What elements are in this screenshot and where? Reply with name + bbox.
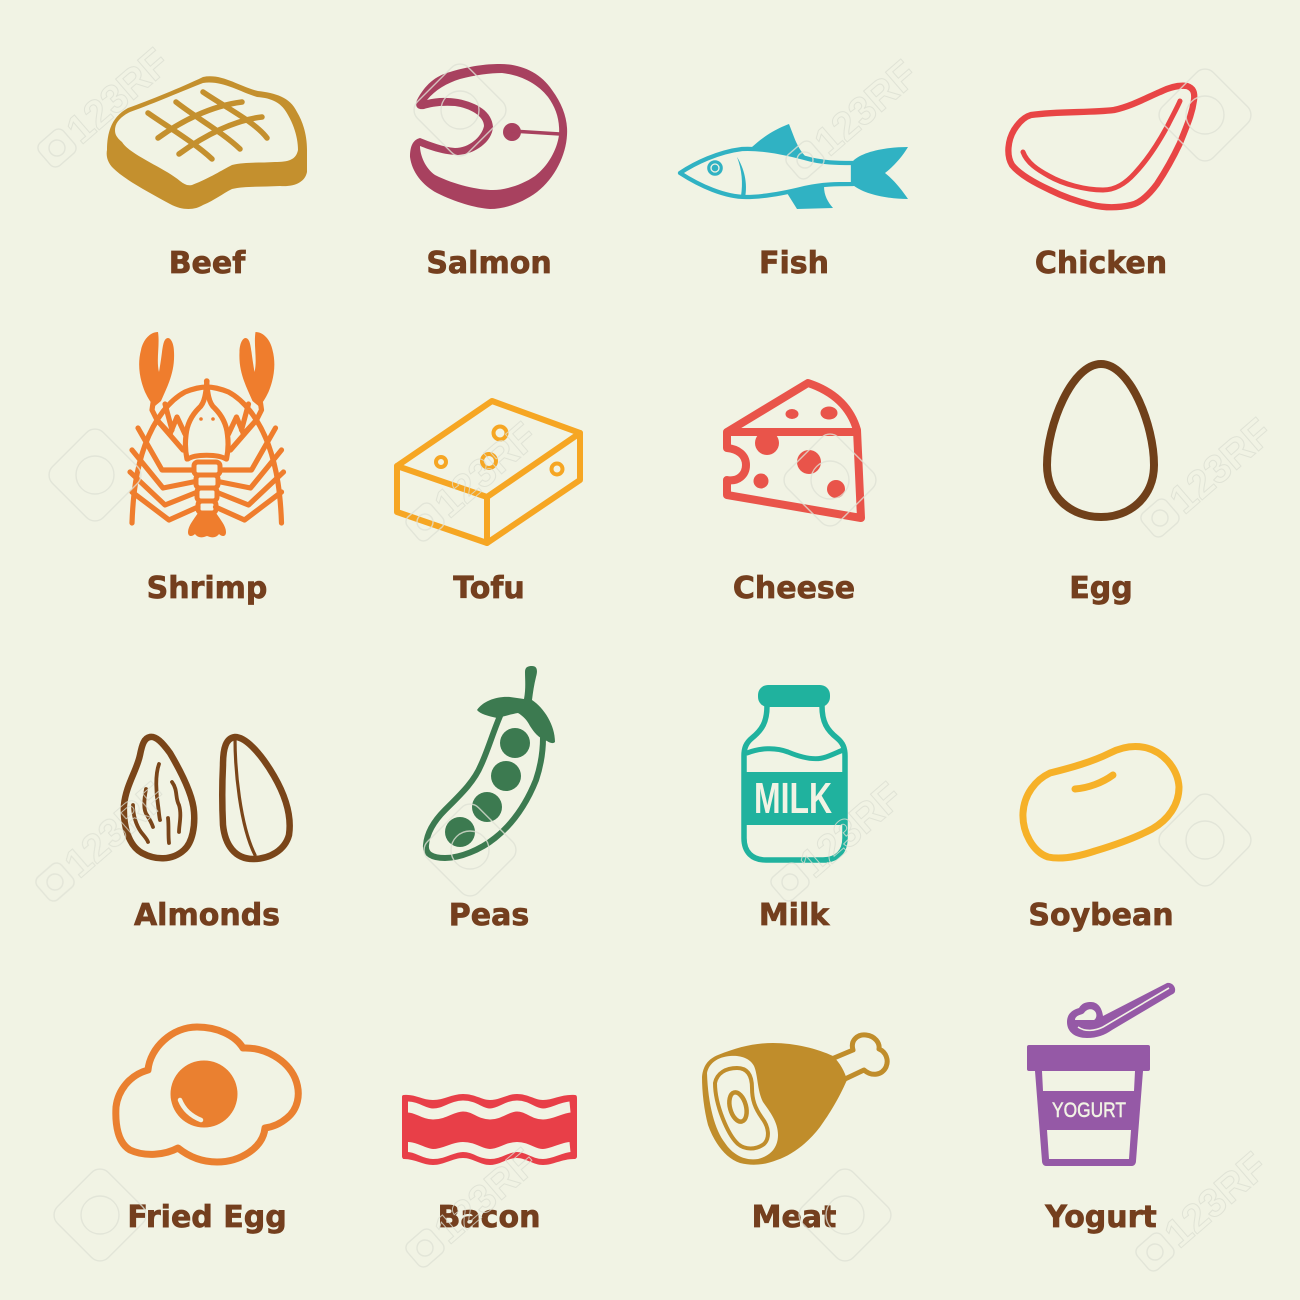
icon: egg: [1047, 364, 1154, 517]
cell: bacon: [402, 1094, 577, 1235]
watermark stamps: 123RF: [426, 1140, 546, 1252]
cell: meat: [702, 1035, 887, 1235]
cell: fish: [680, 124, 908, 281]
watermark stamps: 123RF: [426, 414, 546, 526]
cell: beef: [107, 76, 307, 281]
icon: salmon steak: [410, 64, 567, 209]
icon: cheese wedge: [727, 383, 861, 518]
cell: fried egg: [116, 1027, 298, 1235]
cell: salmon: [410, 64, 567, 281]
cell: cheese: [727, 383, 861, 606]
label: Milk: Milk: [759, 898, 830, 933]
label: Soybean: Soybean: [1028, 898, 1174, 933]
cell: chicken: [1008, 86, 1194, 281]
label: Bacon: Bacon: [438, 1200, 540, 1235]
label: Fish: Fish: [759, 246, 829, 281]
label: Yogurt: Yogurt: [1044, 1200, 1157, 1235]
icon: bacon strip: [402, 1094, 577, 1165]
icon: milk bottle: [743, 685, 846, 860]
icon: ham leg: [702, 1035, 887, 1165]
icon: almonds: [124, 737, 290, 859]
watermark stamps: 123RF: [806, 52, 926, 164]
watermark stamps: 123RF: [1161, 410, 1281, 522]
icon: beef steak: [107, 76, 307, 209]
label: Fried Egg: Fried Egg: [127, 1200, 287, 1235]
label: Cheese: Cheese: [733, 571, 855, 606]
label: Shrimp: Shrimp: [147, 571, 267, 606]
label: Beef: Beef: [169, 246, 246, 281]
icon: pea pod: [426, 666, 555, 858]
icon: fried egg: [116, 1027, 298, 1162]
icon: chicken breast: [1008, 86, 1194, 207]
YOGURT lettering: YOGURT: [1052, 1099, 1126, 1122]
label: Peas: Peas: [449, 898, 529, 933]
icon: tofu block: [397, 401, 580, 543]
cell: yogurt: [1027, 983, 1175, 1235]
icon: shrimp: [130, 332, 284, 537]
cell: tofu: [397, 401, 580, 606]
label: Meat: Meat: [752, 1200, 836, 1235]
icon: soybean: [1023, 747, 1179, 858]
watermark stamps: 123RF: [58, 40, 178, 152]
cell: soybean: [1023, 747, 1179, 933]
cell: peas: [426, 666, 555, 933]
left half of shrimp: [130, 332, 207, 523]
cell: shrimp: [130, 332, 284, 606]
watermark stamps: 123RF: [791, 774, 911, 886]
watermark stamps: 123RF: [1156, 1144, 1276, 1256]
MILK lettering: MILK: [754, 774, 832, 823]
right half of shrimp: [206, 332, 284, 523]
cell: milk: [743, 685, 846, 933]
label: Chicken: Chicken: [1035, 246, 1167, 281]
label: Salmon: Salmon: [426, 246, 552, 281]
icon: yogurt cup and spoon: [1027, 983, 1175, 1166]
cell: egg: [1047, 364, 1154, 606]
watermark stamps: 123RF: [56, 774, 176, 886]
cell: almonds: [124, 737, 290, 933]
icon: fish: [680, 124, 908, 209]
label: Tofu: Tofu: [453, 571, 525, 606]
label: Egg: Egg: [1069, 571, 1133, 606]
label: Almonds: Almonds: [134, 898, 280, 933]
